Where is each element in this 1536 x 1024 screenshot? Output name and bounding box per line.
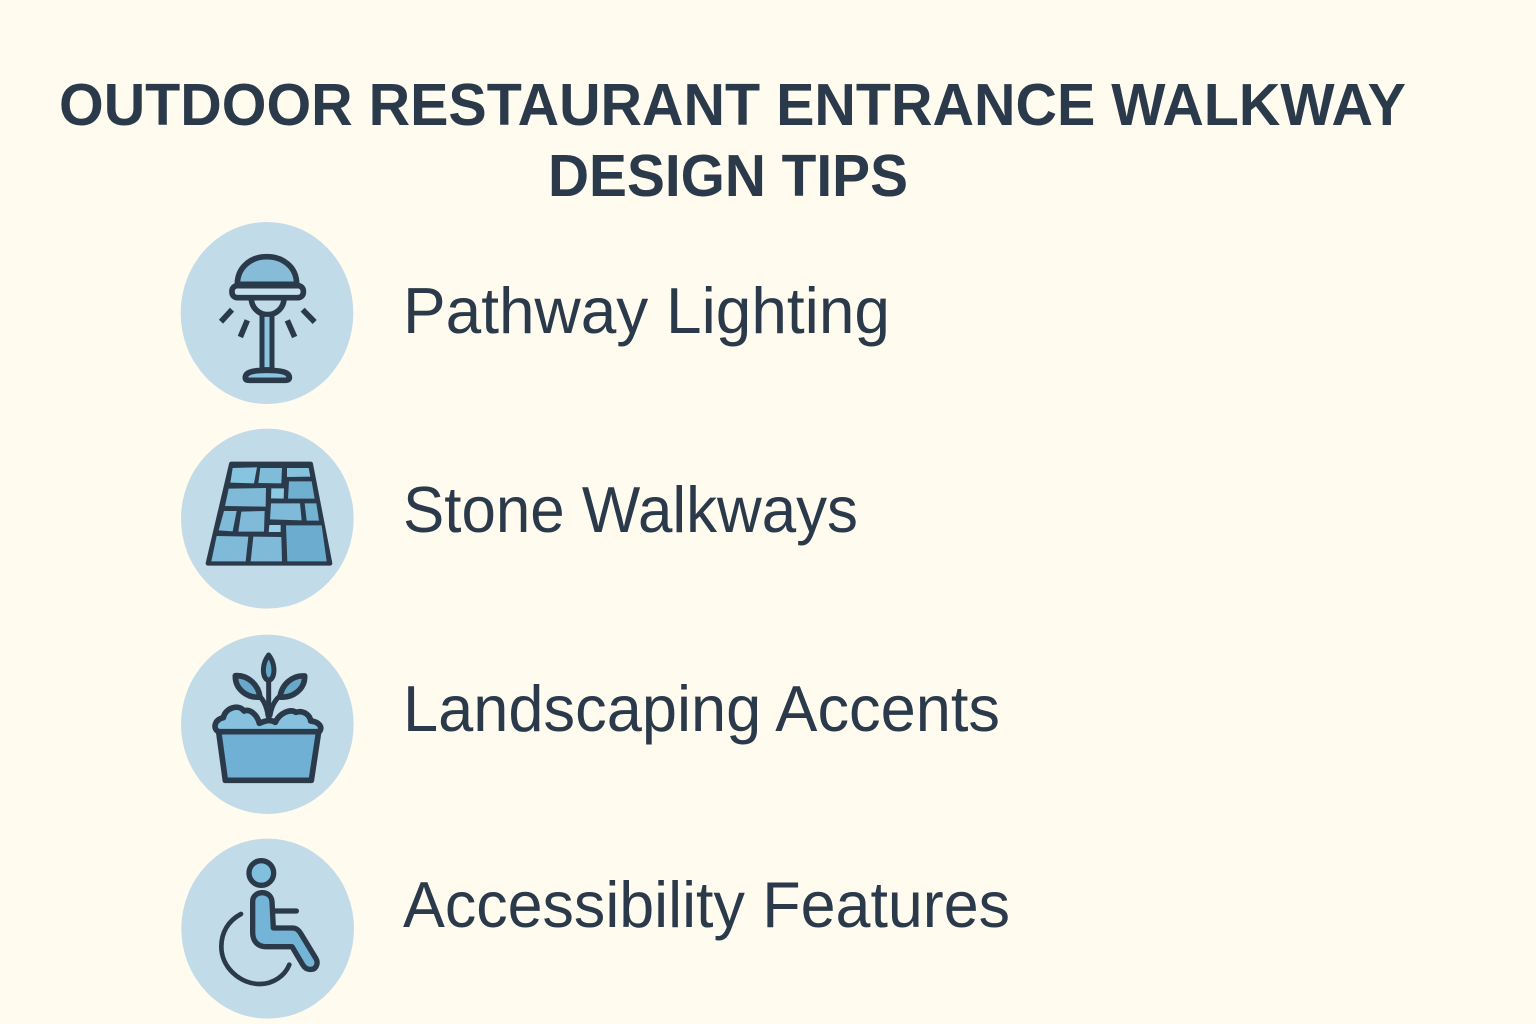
- icon: wheelchair: [181, 839, 354, 1019]
- label: Stone Walkways: [403, 473, 858, 546]
- title: [59, 72, 1406, 209]
- label: Landscaping Accents: [403, 672, 1000, 745]
- item: landscaping accents: [181, 635, 1000, 814]
- label: Pathway Lighting: [403, 274, 890, 347]
- icon: stone paving: [181, 429, 354, 609]
- title: OUTDOOR RESTAURANT ENTRANCE WALKWAY: [59, 72, 1406, 138]
- item: pathway lighting: [181, 222, 890, 404]
- icon: pathway lamp: [181, 222, 353, 404]
- icon: planter: [181, 635, 354, 814]
- label: Accessibility Features: [403, 868, 1010, 941]
- item: stone walkways: [181, 429, 858, 609]
- item: accessibility features: [181, 839, 1010, 1019]
- title: DESIGN TIPS: [548, 143, 908, 209]
